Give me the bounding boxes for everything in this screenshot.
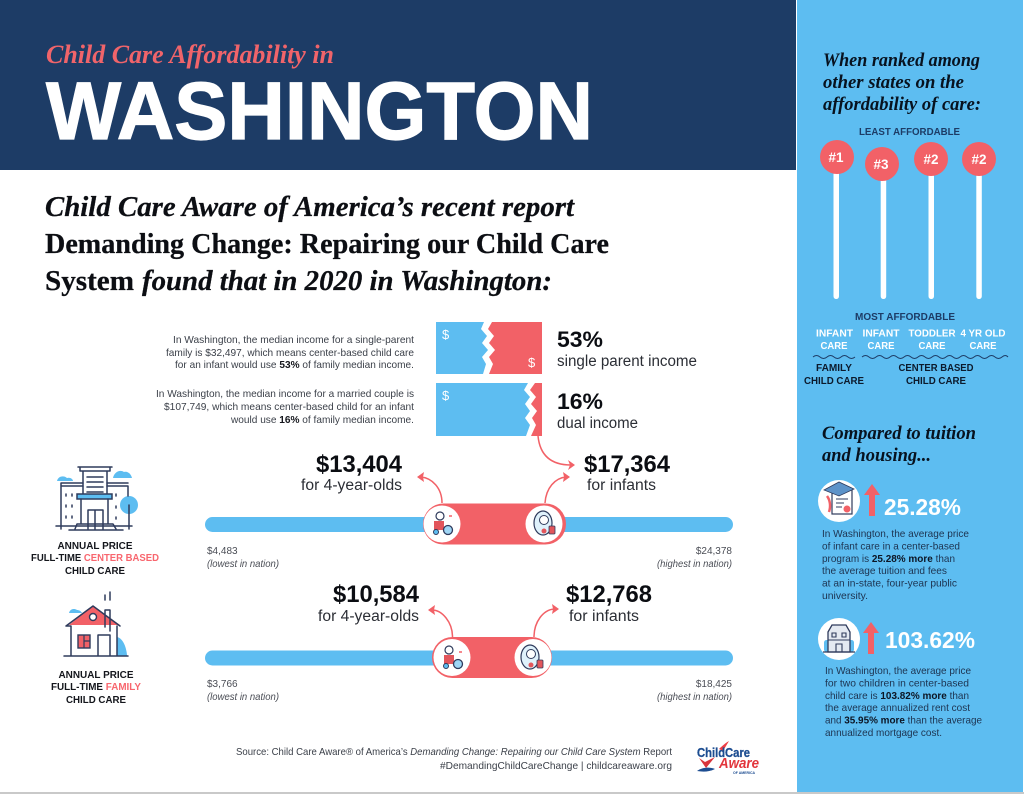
text: married couple income explanation: $107,749, which means center-based child for an infant — [164, 401, 414, 413]
stat: 16% dual income: dual income — [557, 415, 638, 432]
price: center based infants: for infants — [587, 477, 656, 494]
heading: ranking: When ranked among — [823, 51, 980, 71]
chart: single parent torn bar: $ — [528, 355, 536, 370]
price: center based 4-year-olds: $13,404 — [316, 451, 403, 478]
arrow: tuition increase — [864, 484, 880, 516]
logo: Child Care Aware of America: Aware — [718, 755, 759, 772]
icon: child on tricycle — [434, 639, 470, 676]
chart: ranking lollipops: #2 — [971, 152, 987, 167]
intro heading: Child Care Aware of America’s recent report — [45, 192, 575, 223]
text: tuition comparison: university. — [822, 590, 868, 602]
arrow: housing increase — [863, 622, 879, 654]
chart: center based price range — [205, 472, 733, 544]
labels: care types: CARE — [970, 340, 996, 352]
icon: infant in car seat — [514, 639, 552, 676]
labels: care settings — [804, 362, 974, 387]
range labels: center based: (lowest in nation) — [207, 559, 279, 570]
icon: center building — [56, 467, 138, 530]
heading: ranking: affordability of care: — [823, 95, 981, 115]
text: single parent income explanation — [166, 334, 414, 371]
heading: comparisons — [822, 424, 976, 466]
price: family infants — [566, 581, 652, 625]
price: family infants: $12,768 — [566, 581, 652, 608]
title: state name: WASHINGTON — [46, 66, 593, 157]
text: housing comparison: annualized mortgage cost. — [825, 727, 942, 739]
label: annual price family: FULL-TIME FAMILY — [51, 681, 141, 693]
intro heading: found that in 2020 in Washington: — [142, 266, 552, 297]
label: annual price center based: CHILD CARE — [65, 565, 125, 577]
header banner — [0, 0, 796, 170]
range labels: center based: (highest in nation) — [657, 559, 732, 570]
labels: care types — [816, 328, 1006, 352]
text: single parent income explanation: family is $32,497, which means center-based child care — [166, 347, 414, 359]
chart: ranking lollipops: #1 — [828, 150, 844, 165]
label: annual price family: ANNUAL PRICE — [58, 669, 134, 681]
labels: care settings: FAMILY — [816, 362, 852, 374]
label: least affordable: LEAST AFFORDABLE — [859, 126, 960, 138]
labels: care types: CARE — [868, 340, 894, 352]
logo: Child Care Aware of America: OF AMERICA — [733, 771, 756, 775]
icon: child on tricycle — [424, 506, 460, 542]
text: single parent income explanation: for an infant would use 53% of family median income. — [175, 359, 414, 371]
labels: care types: CARE — [918, 340, 946, 352]
heading: comparisons: Compared to tuition — [822, 424, 976, 444]
label: annual price family — [51, 669, 141, 706]
text: single parent income explanation: In Washington, the median income for a single-parent — [173, 334, 414, 346]
source note — [236, 746, 672, 772]
label: annual price center based: FULL-TIME CENTER BASED — [31, 552, 159, 564]
labels: care settings: CENTER BASED — [898, 362, 974, 374]
range labels: family: (lowest in nation) — [207, 692, 279, 703]
range labels: center based: $4,483 — [207, 546, 238, 557]
chart: single parent torn bar: $ — [442, 327, 450, 342]
label: annual price family: CHILD CARE — [66, 694, 126, 706]
heading: ranking: other states on the — [823, 73, 964, 93]
chart: dual income torn bar: $ — [442, 388, 450, 403]
price: family 4-year-olds: for 4-year-olds — [318, 608, 419, 625]
text: married couple income explanation — [156, 388, 414, 426]
labels: care types: CARE — [820, 340, 848, 352]
labels: care types: 4 YR OLD — [960, 328, 1006, 340]
source note: #DemandingChildCareChange | childcareaware.org — [440, 760, 672, 772]
stat: 53% single parent income — [557, 327, 697, 370]
labels: care settings: CHILD CARE — [906, 375, 966, 387]
source note: Source: Child Care Aware® of America’s Demanding Change: Repairing our Child Care System Report — [236, 746, 672, 758]
text: housing comparison: and 35.95% more than the average — [825, 714, 982, 726]
icon: family home — [64, 592, 128, 656]
text: tuition comparison: In Washington, the average price — [822, 528, 969, 540]
label: annual price center based: ANNUAL PRICE — [58, 540, 132, 552]
labels: care types: TODDLER — [908, 328, 956, 340]
price: center based infants: $17,364 — [584, 451, 671, 478]
stat: 53% single parent income: single parent income — [557, 353, 697, 370]
stat: 16% dual income — [557, 389, 638, 432]
text: housing comparison — [825, 665, 982, 739]
intro heading: System — [45, 266, 134, 297]
chart: ranking lollipops — [820, 140, 996, 299]
logo: Child Care Aware of America: ChildCare — [697, 745, 750, 760]
text: tuition comparison: program is 25.28% more than — [822, 553, 955, 565]
text: tuition comparison: at an in-state, four-year public — [822, 578, 957, 590]
text: tuition comparison: the average tuition and fees — [822, 565, 947, 577]
label: annual price center based — [31, 540, 159, 577]
range labels: family: (highest in nation) — [657, 692, 732, 703]
label: most affordable: MOST AFFORDABLE — [855, 311, 955, 323]
icon: diploma — [818, 480, 860, 522]
stat: 25.28%: 25.28% — [884, 494, 961, 520]
labels: care settings: CHILD CARE — [804, 375, 864, 387]
chart: ranking lollipops: #2 — [923, 152, 939, 167]
text: housing comparison: for two children in center-based — [825, 678, 969, 690]
intro heading — [45, 192, 609, 297]
text: housing comparison: child care is 103.82% more than — [825, 690, 969, 702]
labels: care types: INFANT — [816, 328, 854, 340]
text: tuition comparison — [822, 528, 969, 602]
range labels: family: $3,766 — [207, 679, 238, 690]
labels: care types: INFANT — [862, 328, 900, 340]
range labels: family: $18,425 — [696, 679, 732, 690]
range labels: center based — [207, 546, 732, 570]
price: family 4-year-olds — [318, 581, 420, 625]
price: center based 4-year-olds: for 4-year-olds — [301, 477, 402, 494]
text: housing comparison: the average annualized rent cost — [825, 702, 970, 714]
range labels: center based: $24,378 — [696, 546, 732, 557]
heading: comparisons: and housing... — [822, 446, 931, 466]
price: center based 4-year-olds — [301, 451, 403, 494]
chart: ranking lollipops: #3 — [873, 157, 889, 172]
text: married couple income explanation: would use 16% of family median income. — [230, 414, 414, 426]
chart: family price range — [205, 604, 733, 678]
logo: Child Care Aware of America — [697, 741, 759, 775]
title: kicker: Child Care Affordability in — [46, 40, 334, 69]
icon: infant in car seat — [526, 506, 562, 542]
chart: dual income torn bar — [436, 383, 542, 436]
chart: single parent torn bar — [436, 322, 542, 374]
icon: house — [818, 618, 860, 660]
text: housing comparison: In Washington, the average price — [825, 665, 971, 677]
arrow: dual income to infant price — [538, 436, 575, 470]
price: family infants: for infants — [569, 608, 639, 625]
text: married couple income explanation: In Washington, the median income for a married couple is — [156, 388, 414, 400]
range labels: family — [207, 679, 732, 703]
panel: state ranking and comparisons — [797, 0, 1023, 792]
price: family 4-year-olds: $10,584 — [333, 581, 420, 608]
intro heading: Demanding Change: Repairing our Child Care — [45, 229, 609, 260]
stat: 53% single parent income: 53% — [557, 327, 603, 352]
price: center based infants — [584, 451, 671, 494]
stat: 103.62%: 103.62% — [885, 627, 975, 653]
heading: ranking — [823, 51, 981, 115]
text: tuition comparison: of infant care in a center-based — [822, 540, 960, 552]
stat: 16% dual income: 16% — [557, 389, 603, 414]
